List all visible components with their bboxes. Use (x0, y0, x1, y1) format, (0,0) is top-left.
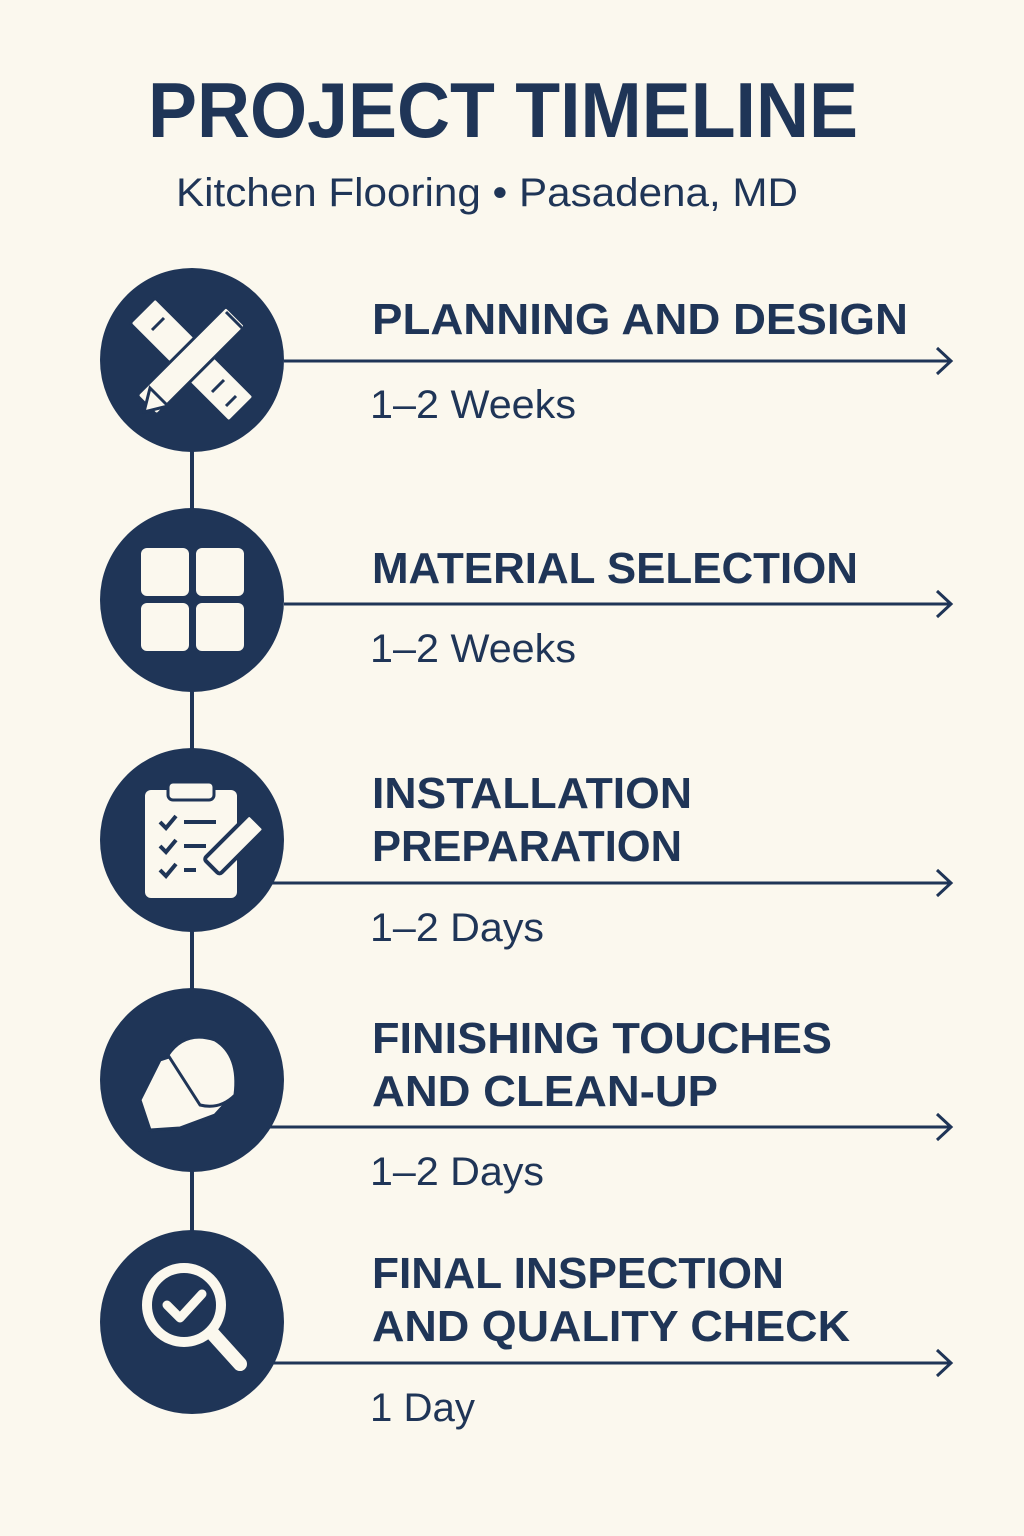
step 5: final inspection: FINAL INSPECTION (372, 1249, 784, 1298)
subtitle: Kitchen Flooring • Pasadena, MD (176, 171, 798, 215)
step 5: final inspection: 1 Day (370, 1386, 475, 1430)
step 2: material (100, 508, 951, 692)
step 4: finishing: 1–2 Days (370, 1150, 544, 1194)
step 5: final inspection (100, 1230, 951, 1430)
icon: hand with cloth (140, 1037, 238, 1130)
step 2: material: 1–2 Weeks (370, 627, 576, 671)
step 4: finishing: FINISHING TOUCHES (372, 1014, 832, 1063)
icon: magnifier with check (147, 1268, 240, 1364)
connector line (190, 440, 194, 1250)
step 3: installation prep: PREPARATION (372, 822, 682, 871)
icon: clipboard (145, 782, 265, 898)
title: PROJECT TIMELINE (148, 66, 858, 154)
step 1: planning (100, 268, 951, 452)
step 2: material: MATERIAL SELECTION (372, 544, 858, 593)
step 4: finishing (100, 988, 951, 1194)
icon: ruler and pencil (130, 298, 254, 422)
step 1: planning: PLANNING AND DESIGN (372, 295, 908, 344)
step 3: installation prep: INSTALLATION (372, 769, 692, 818)
step 4: finishing: AND CLEAN-UP (372, 1067, 718, 1116)
step 1: planning: 1–2 Weeks (370, 383, 576, 427)
step 5: final inspection: AND QUALITY CHECK (372, 1302, 850, 1351)
step 3: installation prep: 1–2 Days (370, 906, 544, 950)
icon: tiles (141, 548, 244, 651)
step 3: installation prep (100, 748, 951, 950)
